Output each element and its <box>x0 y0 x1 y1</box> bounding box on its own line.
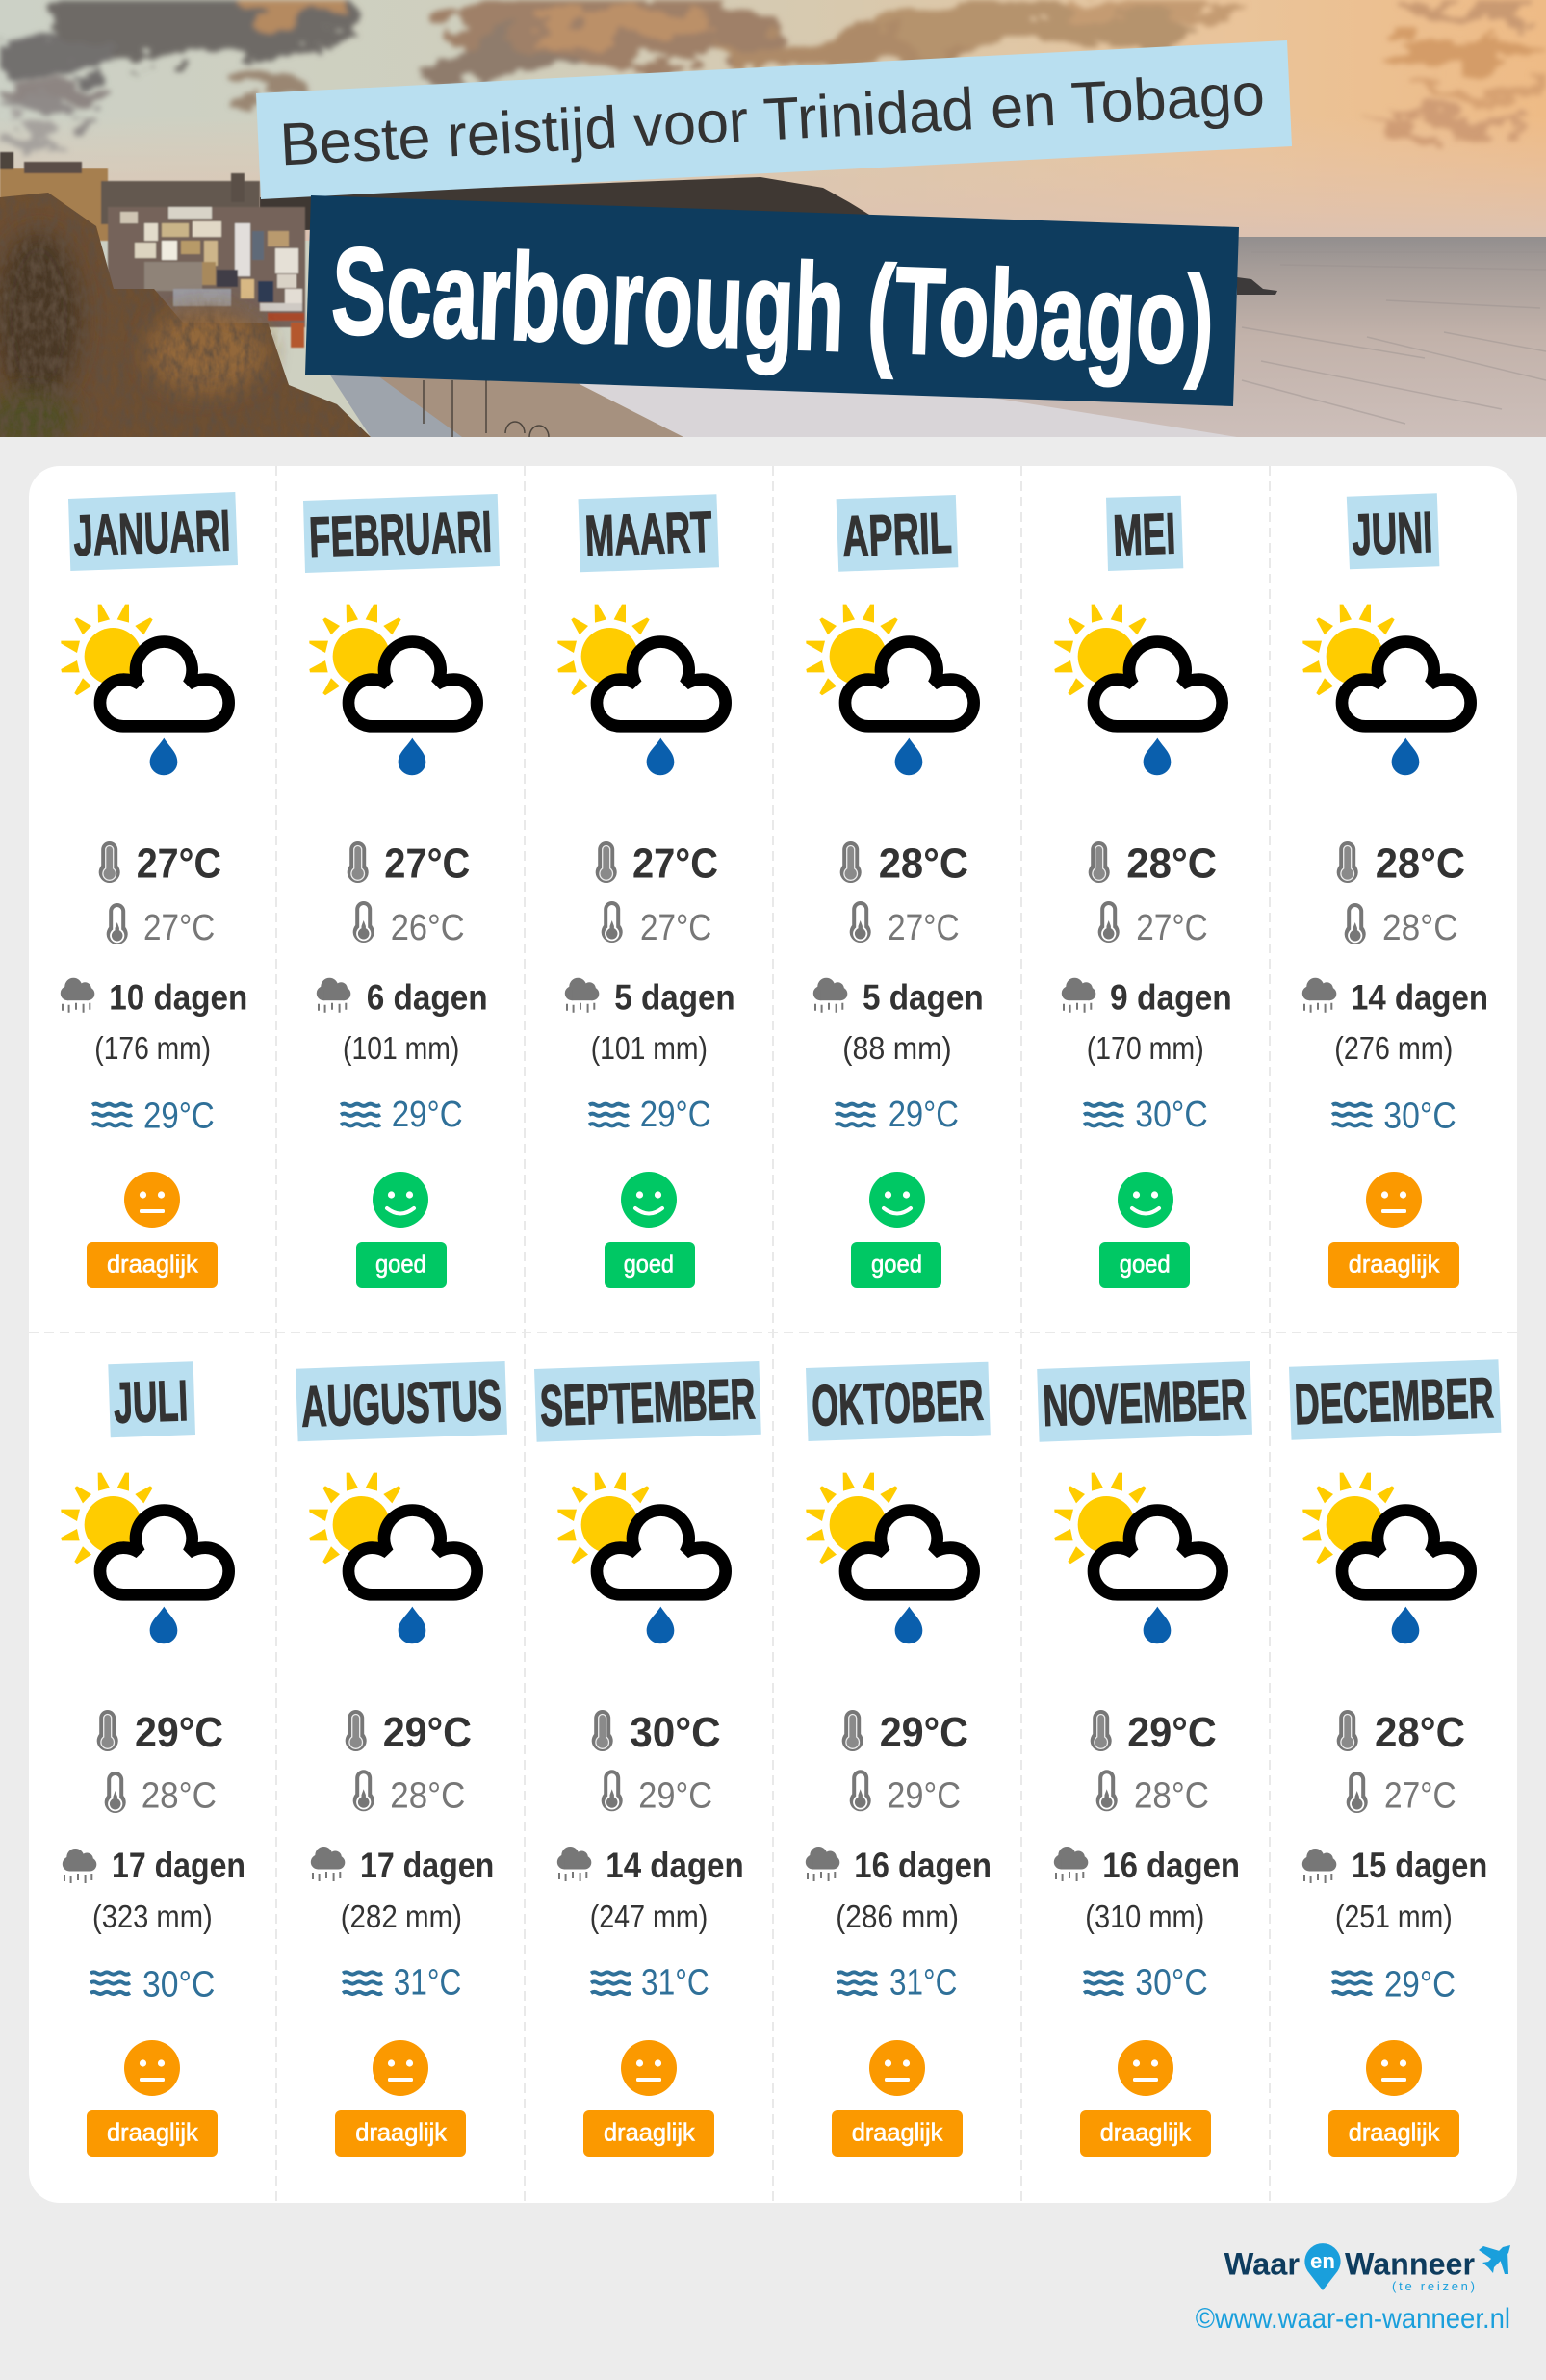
sea temperature: 30°C <box>1135 1963 1208 2004</box>
sea temperature <box>92 1097 215 1137</box>
month label: JUNI <box>1351 500 1433 567</box>
maximum temperature: 29°C <box>880 1709 968 1756</box>
rain days <box>565 977 735 1017</box>
icon: neutral face <box>373 2040 428 2096</box>
maximum temperature <box>840 841 968 888</box>
rainfall: (101 mm) <box>591 1030 708 1066</box>
rainfall: (176 mm) <box>94 1030 211 1066</box>
maximum temperature <box>348 841 470 888</box>
icon: neutral face <box>124 1172 180 1228</box>
badge: draaglijk: draaglijk <box>355 2117 448 2146</box>
rain days <box>1302 977 1488 1017</box>
month label <box>578 494 719 572</box>
panel: januari <box>61 492 247 1288</box>
panel: augustus <box>296 1361 507 2157</box>
badge: draaglijk: draaglijk <box>107 1250 199 1279</box>
rain days: 5 dagen <box>614 977 735 1017</box>
rain days <box>1062 977 1232 1017</box>
rain days <box>806 1846 992 1885</box>
sea temperature <box>836 1095 959 1135</box>
maximum temperature <box>592 1709 721 1756</box>
minimum temperature <box>602 901 711 948</box>
minimum temperature <box>1098 901 1208 948</box>
icon: happy face <box>1118 1172 1173 1228</box>
minimum temperature <box>1345 903 1458 948</box>
maximum temperature: 30°C <box>630 1709 721 1756</box>
icon: neutral face <box>124 2040 180 2096</box>
logo: Waar en Wanneer: Waar <box>1224 2246 1300 2281</box>
rain days: 16 dagen <box>854 1846 992 1885</box>
sea temperature: 31°C <box>889 1963 957 2004</box>
panel: september <box>534 1361 761 2157</box>
rain days: 9 dagen <box>1110 977 1232 1017</box>
logo: Waar en Wanneer: (te reizen) <box>1392 2279 1475 2293</box>
panel: maart <box>557 494 735 1288</box>
icon: neutral face <box>1366 1172 1422 1228</box>
icon: sun, cloud, rain drop <box>1054 605 1223 775</box>
maximum temperature: 28°C <box>1126 841 1217 888</box>
icon: happy face <box>373 1172 428 1228</box>
badge: draaglijk: draaglijk <box>604 2117 696 2146</box>
sea temperature <box>90 1964 215 2005</box>
month label <box>806 1362 991 1441</box>
card panel <box>29 466 1517 2203</box>
town buildings <box>0 152 305 348</box>
sea temperature <box>837 1963 957 2004</box>
month label <box>68 492 238 571</box>
rain days <box>317 977 488 1017</box>
badge: goed: goed <box>624 1250 674 1279</box>
rain days: 5 dagen <box>863 977 984 1017</box>
sea temperature <box>1332 1964 1456 2005</box>
panel: oktober <box>806 1362 992 2157</box>
badge: draaglijk: draaglijk <box>1100 2117 1192 2146</box>
icon: neutral face <box>869 2040 925 2096</box>
month label <box>108 1361 195 1437</box>
month label <box>1037 1361 1252 1442</box>
maximum temperature <box>346 1709 472 1756</box>
beach and shallow water <box>327 371 1237 437</box>
minimum temperature <box>850 1770 961 1816</box>
minimum temperature: 27°C <box>1136 908 1208 948</box>
minimum temperature: 28°C <box>390 1775 465 1816</box>
badge: draaglijk <box>335 2110 466 2157</box>
month label <box>1347 493 1439 569</box>
badge: draaglijk <box>1328 1242 1459 1288</box>
month label: AUGUSTUS <box>300 1367 502 1439</box>
panel: juli <box>61 1361 245 2157</box>
maximum temperature <box>1337 1709 1465 1756</box>
badge: goed: goed <box>871 1250 922 1279</box>
rainfall: (101 mm) <box>343 1030 459 1066</box>
badge: goed <box>1099 1242 1190 1288</box>
clouds <box>0 0 1546 142</box>
icon: neutral face <box>1118 2040 1173 2096</box>
rainfall: (88 mm) <box>842 1030 952 1066</box>
maximum temperature <box>97 1709 223 1756</box>
minimum temperature <box>602 1770 712 1816</box>
sea temperature: 31°C <box>641 1963 709 2004</box>
badge: draaglijk: draaglijk <box>852 2117 943 2146</box>
icon: sun, cloud, rain drop <box>557 605 726 775</box>
logo: Waar en Wanneer <box>1224 2243 1510 2293</box>
badge: draaglijk: draaglijk <box>107 2117 199 2146</box>
trees <box>0 193 371 446</box>
badge: draaglijk: draaglijk <box>1349 1250 1440 1279</box>
sea temperature: 31°C <box>394 1963 461 2004</box>
sea temperature: 30°C <box>142 1964 215 2005</box>
maximum temperature: 28°C <box>1376 841 1465 888</box>
icon: sun, cloud, rain drop <box>806 605 974 775</box>
badge: draaglijk <box>1328 2110 1459 2157</box>
badge: goed <box>851 1242 941 1288</box>
icon: map pin: en <box>1310 2249 1335 2273</box>
minimum temperature <box>107 903 215 948</box>
minimum temperature: 28°C <box>1134 1775 1209 1816</box>
month label <box>303 494 500 573</box>
icon: sun, cloud, rain drop <box>557 1473 726 1643</box>
rain days <box>63 1846 245 1885</box>
sea temperature: 29°C <box>392 1095 463 1135</box>
minimum temperature: 27°C <box>888 908 960 948</box>
badge: draaglijk <box>832 2110 963 2157</box>
rainfall: (286 mm) <box>836 1899 959 1934</box>
hero photo: coastal sunset <box>0 0 1546 446</box>
month label <box>837 495 958 572</box>
jetty <box>1237 277 1277 295</box>
icon: sun, cloud, rain drop <box>309 605 477 775</box>
sea <box>963 237 1546 437</box>
minimum temperature <box>353 901 465 948</box>
maximum temperature <box>1089 841 1217 888</box>
maximum temperature <box>1337 841 1465 888</box>
panel: juni <box>1302 493 1488 1288</box>
month label: SEPTEMBER <box>539 1366 757 1438</box>
rainfall: (282 mm) <box>341 1899 462 1934</box>
icon: airplane <box>1479 2245 1510 2274</box>
sea temperature <box>1084 1095 1208 1135</box>
minimum temperature: 27°C <box>1384 1775 1456 1816</box>
minimum temperature: 29°C <box>638 1775 712 1816</box>
sea temperature: 29°C <box>889 1095 959 1135</box>
minimum temperature <box>1096 1770 1209 1816</box>
maximum temperature <box>1091 1709 1217 1756</box>
icon: sun, cloud, rain drop <box>806 1473 974 1643</box>
maximum temperature: 29°C <box>383 1709 472 1756</box>
icon: happy face <box>869 1172 925 1228</box>
month label: JULI <box>113 1368 189 1436</box>
rain days: 6 dagen <box>367 977 488 1017</box>
icon: neutral face <box>1366 2040 1422 2096</box>
minimum temperature: 27°C <box>640 908 711 948</box>
maximum temperature: 27°C <box>384 841 470 888</box>
badge: draaglijk <box>583 2110 714 2157</box>
minimum temperature: 27°C <box>143 908 215 948</box>
badge: draaglijk <box>87 1242 218 1288</box>
rainfall: (247 mm) <box>590 1899 708 1934</box>
sea temperature: 29°C <box>143 1097 215 1137</box>
banner: title <box>305 195 1239 406</box>
rain days: 14 dagen <box>606 1846 744 1885</box>
month label <box>1106 496 1183 571</box>
maximum temperature: 27°C <box>137 841 221 888</box>
icon: map pin <box>1304 2243 1341 2290</box>
rain days <box>1302 1846 1487 1885</box>
rain days: 14 dagen <box>1351 977 1488 1017</box>
minimum temperature <box>353 1770 465 1816</box>
rain days <box>813 977 984 1017</box>
panel: april <box>806 495 984 1288</box>
rainfall: (310 mm) <box>1085 1899 1204 1934</box>
maximum temperature <box>842 1709 968 1756</box>
rainfall: (323 mm) <box>92 1899 213 1934</box>
minimum temperature: 28°C <box>142 1775 217 1816</box>
rain days: 16 dagen <box>1102 1846 1240 1885</box>
month label: MEI <box>1112 501 1176 568</box>
sea temperature: 29°C <box>640 1095 711 1135</box>
rain days <box>1054 1846 1240 1885</box>
sea temperature <box>1084 1963 1208 2004</box>
icon: sun, cloud, rain drop <box>309 1473 477 1643</box>
rainfall: (251 mm) <box>1335 1899 1453 1934</box>
badge: goed <box>356 1242 447 1288</box>
month label: OKTOBER <box>811 1368 985 1438</box>
month label: FEBRUARI <box>308 499 493 570</box>
icon: sun, cloud, rain drop <box>1054 1473 1223 1643</box>
sea temperature <box>591 1963 709 2004</box>
rain days: 17 dagen <box>360 1846 494 1885</box>
ripples on the sea <box>1242 300 1546 424</box>
month label: JANUARI <box>72 498 231 568</box>
maximum temperature: 28°C <box>1375 1709 1465 1756</box>
rain days <box>311 1846 494 1885</box>
rainfall: (276 mm) <box>1334 1030 1453 1066</box>
icon: sun, cloud, rain drop <box>1302 1473 1471 1643</box>
rain days: 17 dagen <box>112 1846 245 1885</box>
icon: sun, cloud, rain drop <box>1302 605 1471 775</box>
panel: februari <box>303 494 500 1288</box>
panel: november <box>1037 1361 1252 2157</box>
badge: goed: goed <box>1120 1250 1171 1279</box>
panel: december <box>1289 1359 1501 2157</box>
website credit: ©www.waar-en-wanneer.nl <box>1196 2303 1510 2335</box>
badge: goed: goed <box>375 1250 426 1279</box>
sea temperature <box>589 1095 711 1135</box>
badge: draaglijk <box>1080 2110 1211 2157</box>
rain days: 15 dagen <box>1352 1846 1487 1885</box>
sea temperature <box>343 1963 461 2004</box>
sea temperature <box>1332 1097 1456 1137</box>
month label <box>534 1361 761 1442</box>
icon: neutral face <box>621 2040 677 2096</box>
badge: draaglijk: draaglijk <box>1349 2117 1440 2146</box>
rainfall: (170 mm) <box>1087 1030 1204 1066</box>
minimum temperature <box>1347 1772 1456 1816</box>
month label: MAART <box>584 500 713 568</box>
month label: APRIL <box>841 501 953 569</box>
badge: draaglijk <box>87 2110 218 2157</box>
maximum temperature: 29°C <box>135 1709 223 1756</box>
logo: Waar en Wanneer: Wanneer <box>1345 2246 1475 2281</box>
minimum temperature: 26°C <box>391 908 465 948</box>
minimum temperature: 29°C <box>887 1775 961 1816</box>
rain days <box>61 977 247 1017</box>
icon: sun, cloud, rain drop <box>61 605 229 775</box>
sea temperature: 29°C <box>1384 1964 1456 2005</box>
maximum temperature <box>596 841 718 888</box>
minimum temperature: 28°C <box>1382 908 1458 948</box>
headland <box>260 177 874 231</box>
maximum temperature <box>99 841 221 888</box>
month label: NOVEMBER <box>1042 1367 1247 1438</box>
rain days <box>557 1846 744 1885</box>
sea temperature: 30°C <box>1383 1097 1456 1137</box>
panel: mei <box>1054 496 1232 1288</box>
sea temperature <box>341 1095 463 1135</box>
icon: sun, cloud, rain drop <box>61 1473 229 1643</box>
minimum temperature <box>105 1772 217 1816</box>
icon: happy face <box>621 1172 677 1228</box>
sea temperature: 30°C <box>1135 1095 1208 1135</box>
minimum temperature <box>850 901 960 948</box>
banner: subtitle: Beste reistijd voor Trinidad en Tobago <box>278 62 1266 178</box>
rain days: 10 dagen <box>109 977 247 1017</box>
month label <box>296 1361 507 1441</box>
maximum temperature: 29°C <box>1127 1709 1217 1756</box>
maximum temperature: 28°C <box>879 841 968 888</box>
maximum temperature: 27°C <box>632 841 718 888</box>
badge: goed <box>605 1242 695 1288</box>
